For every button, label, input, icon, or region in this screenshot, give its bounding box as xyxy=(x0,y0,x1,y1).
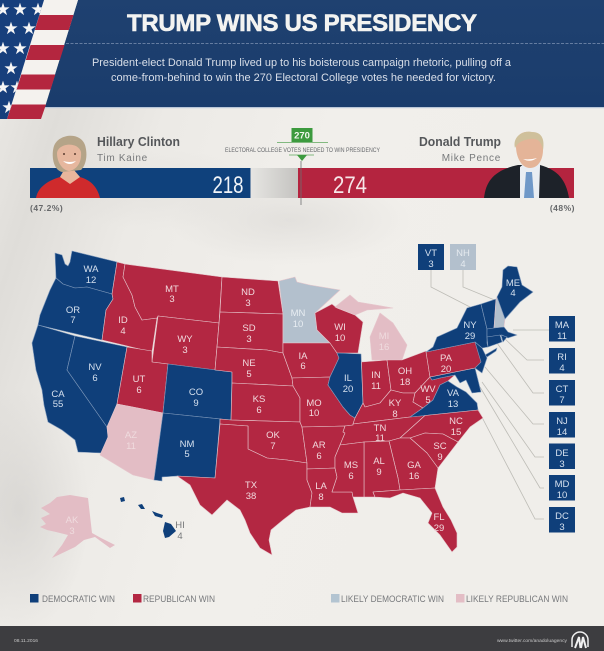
state: SC: 9 xyxy=(437,452,443,463)
state: ID: ID xyxy=(118,315,128,326)
icon: american flag: ★ xyxy=(12,0,28,19)
state: AZ xyxy=(100,404,163,480)
box: NJ: 14 xyxy=(557,427,567,438)
bar: Trump 274 xyxy=(298,168,574,198)
candidate: Donald Trump: Donald Trump xyxy=(419,135,501,149)
state: CO: 9 xyxy=(193,398,199,409)
box: MD: 10 xyxy=(557,490,567,501)
state: VA: VA xyxy=(447,388,460,399)
state: CA xyxy=(32,325,108,453)
state: WA xyxy=(55,251,117,294)
state: WV: 5 xyxy=(425,395,431,406)
badge: 270 xyxy=(292,128,312,142)
state: CT xyxy=(487,335,502,347)
state: AL: 9 xyxy=(376,467,382,478)
state: ND: ND xyxy=(241,287,255,298)
subtitle: come-from-behind to win the 270 Electoral College votes he needed for victory. xyxy=(111,72,496,84)
state: KY: 8 xyxy=(392,409,398,420)
state: TX: 38 xyxy=(246,491,256,502)
state: WV xyxy=(413,375,455,408)
box: DE: DE xyxy=(555,448,569,459)
state: OH xyxy=(387,351,430,393)
subtitle xyxy=(92,57,512,84)
state: VA: 13 xyxy=(448,399,458,410)
box: CT xyxy=(549,380,575,406)
state: KY xyxy=(353,390,423,424)
bar: remaining votes xyxy=(251,168,298,198)
state: NJ xyxy=(475,342,487,373)
state: VA xyxy=(410,381,478,417)
state: AR: AR xyxy=(312,440,326,451)
photo: Hillary Clinton xyxy=(36,136,100,198)
box: CT: 7 xyxy=(559,395,565,406)
state: IL xyxy=(328,353,363,418)
state: AZ: 11 xyxy=(126,441,136,452)
state: NH xyxy=(494,297,505,328)
state: SC xyxy=(410,433,458,468)
state: WI: WI xyxy=(334,322,346,333)
legend: republican win: REPUBLICAN WIN xyxy=(143,594,215,605)
state: WV: WV xyxy=(420,384,436,395)
box: VT xyxy=(418,244,444,270)
state: ME: 4 xyxy=(510,288,516,299)
state: MN: 10 xyxy=(293,319,303,330)
state: SC: SC xyxy=(433,441,447,452)
state: LA: 8 xyxy=(318,492,324,503)
box: DC xyxy=(549,507,575,533)
state: IN xyxy=(362,360,391,407)
state: WY: WY xyxy=(177,334,193,345)
state: NV: 6 xyxy=(92,373,98,384)
state: MN: MN xyxy=(291,308,306,319)
state: NV: NV xyxy=(88,362,102,373)
box: DE xyxy=(549,444,575,470)
US electoral map xyxy=(32,251,533,558)
box: NH xyxy=(450,244,476,270)
icon: american flag: ★ xyxy=(21,19,37,38)
state: NM: NM xyxy=(180,439,194,450)
candidate: Hillary Clinton: Hillary Clinton xyxy=(97,135,180,149)
box: RI: RI xyxy=(557,352,567,363)
header banner xyxy=(45,0,604,108)
state: WY: 3 xyxy=(182,345,188,356)
state: MO: MO xyxy=(306,398,322,409)
leader lines for small states xyxy=(431,270,549,519)
state: MD xyxy=(430,368,481,393)
state: ME xyxy=(497,266,533,319)
state: SD: 3 xyxy=(246,334,252,345)
state: AR xyxy=(302,426,345,469)
state: MI xyxy=(335,295,407,360)
box: DC: DC xyxy=(555,511,569,522)
state: ME: ME xyxy=(506,278,520,289)
state: WA: 12 xyxy=(86,275,96,286)
date: 08.11.2016 xyxy=(14,638,39,643)
state: LA: LA xyxy=(315,481,327,492)
state: NE: 5 xyxy=(246,369,252,380)
box: VT: VT xyxy=(425,248,437,259)
legend xyxy=(30,594,568,605)
state: MO: 10 xyxy=(309,408,319,419)
state: CA: 55 xyxy=(53,399,63,410)
legend: democratic win: DEMOCRATIC WIN xyxy=(42,594,115,605)
state: UT: UT xyxy=(133,374,146,385)
state: AK: 3 xyxy=(69,526,75,537)
state: NY xyxy=(426,304,497,357)
state: UT: 6 xyxy=(136,385,142,396)
box: CT: CT xyxy=(556,384,569,395)
state: CA: CA xyxy=(51,389,65,400)
title: TRUMP WINS US PRESIDENCY xyxy=(127,10,477,37)
footer xyxy=(0,626,604,651)
state: CO: CO xyxy=(189,387,203,398)
state: NY: 29 xyxy=(465,331,475,342)
box: NJ: NJ xyxy=(556,416,568,427)
state: FL xyxy=(373,488,457,552)
state: FL: 29 xyxy=(434,523,444,534)
state: ID: 4 xyxy=(120,326,126,337)
state: IA: 6 xyxy=(300,361,306,372)
state: KS xyxy=(231,383,300,422)
number: 274: 274 xyxy=(333,172,367,199)
subtitle: President-elect Donald Trump lived up to his boisterous campaign rhetoric, pulling off a xyxy=(92,57,512,69)
icon: american flag: ★ xyxy=(12,39,28,58)
state: AK xyxy=(40,495,115,558)
icon: american flag: ★ xyxy=(3,19,19,38)
state: OK: OK xyxy=(266,430,281,441)
state: IA xyxy=(283,343,339,378)
caption: electoral votes needed: ELECTORAL COLLEGE VOTES NEEDED TO WIN PRESIDENCY xyxy=(225,147,380,154)
icon: american flag: ★ xyxy=(1,98,17,117)
state: OH: 18 xyxy=(400,377,410,388)
state: NC xyxy=(400,410,483,442)
state: SD: SD xyxy=(242,323,256,334)
state: AR: 6 xyxy=(316,451,322,462)
icon: american flag: ★ xyxy=(30,0,46,19)
state: LA xyxy=(307,468,358,513)
state: IN: 11 xyxy=(371,381,381,392)
number: 218: 218 xyxy=(212,172,244,199)
state: GA: GA xyxy=(407,460,422,471)
state: MS: 6 xyxy=(348,471,354,482)
box: VT: 3 xyxy=(428,259,434,270)
box: MA: MA xyxy=(555,320,570,331)
box: RI xyxy=(549,348,575,374)
legend: likely republican win: LIKELY REPUBLICAN WIN xyxy=(466,594,568,605)
percentage: Clinton: (47.2%) xyxy=(30,203,63,213)
state: GA: 16 xyxy=(409,471,419,482)
state: GA xyxy=(389,438,438,490)
state: UT xyxy=(117,347,168,413)
state: TX: TX xyxy=(245,480,258,491)
state: HI: HI xyxy=(175,520,185,531)
box: MA: 11 xyxy=(557,331,567,342)
source url: www.twitter.com/anadoluagency xyxy=(497,638,568,643)
state: HI xyxy=(120,497,185,542)
icon: american flag: ★ xyxy=(9,78,25,97)
state: FL: FL xyxy=(433,512,445,523)
photo: Donald Trump xyxy=(484,132,569,198)
state: TN: TN xyxy=(374,423,386,434)
state: IN: IN xyxy=(371,370,381,381)
state: WI: 10 xyxy=(335,333,345,344)
state: ND: 3 xyxy=(245,298,251,309)
state: OK xyxy=(220,419,307,463)
270 threshold marker xyxy=(225,128,380,205)
score bar xyxy=(30,168,574,199)
state: ID xyxy=(102,262,157,352)
box: DE: 3 xyxy=(559,459,565,470)
state: NM: 5 xyxy=(184,449,190,460)
box: DC: 3 xyxy=(559,522,565,533)
state: PA xyxy=(426,342,482,377)
state: NY: NY xyxy=(463,320,477,331)
state: IL: 20 xyxy=(343,384,353,395)
state: MA xyxy=(487,327,517,338)
state: MN xyxy=(279,277,340,343)
box: NH: NH xyxy=(456,248,470,259)
box: NH: 4 xyxy=(460,259,466,270)
state: SD xyxy=(217,312,283,353)
running mate: Tim Kaine: Tim Kaine xyxy=(97,153,148,164)
state: MO xyxy=(292,377,355,427)
state: PA: PA xyxy=(440,353,453,364)
state: OH: OH xyxy=(398,366,412,377)
state: AZ: AZ xyxy=(125,430,137,441)
icon: american flag: ★ xyxy=(3,59,19,78)
box: MD: MD xyxy=(555,479,570,490)
state: RI xyxy=(501,335,507,342)
state: NE: NE xyxy=(242,358,256,369)
state: MS xyxy=(332,442,364,497)
state: MT xyxy=(123,264,222,323)
state: CO xyxy=(163,364,232,420)
state: TN xyxy=(340,416,425,445)
legend: likely democratic win: LIKELY DEMOCRATIC WIN xyxy=(341,594,444,605)
state: NM xyxy=(154,413,220,481)
state: IL: IL xyxy=(344,373,352,384)
box: RI: 4 xyxy=(559,363,565,374)
icon: american flag xyxy=(0,0,78,119)
state: MS: MS xyxy=(344,460,358,471)
state: OR xyxy=(38,278,113,340)
state: OK: 7 xyxy=(270,441,276,452)
state: MI: 16 xyxy=(379,342,389,353)
state: ND xyxy=(220,277,283,314)
state: KY: KY xyxy=(389,398,402,409)
state: KS: 6 xyxy=(256,405,262,416)
state: AL xyxy=(364,441,400,497)
state: MT: MT xyxy=(165,284,179,295)
state: MI: MI xyxy=(379,331,389,342)
state: OR: OR xyxy=(66,305,80,316)
state: WI xyxy=(315,304,363,353)
state: TN: 11 xyxy=(375,433,385,444)
state: NE xyxy=(215,347,293,386)
state: NC: NC xyxy=(449,416,463,427)
state: HI: 4 xyxy=(177,531,183,542)
state: IA: IA xyxy=(299,351,308,362)
state: TX xyxy=(177,424,312,555)
state: KS: KS xyxy=(253,394,265,405)
state: WY xyxy=(152,316,219,370)
state: NV xyxy=(67,336,127,427)
box: MA xyxy=(549,316,575,342)
box: NJ xyxy=(549,412,575,438)
bar: Clinton 218 xyxy=(30,168,250,198)
state: PA: 20 xyxy=(441,364,451,375)
state: MT: 3 xyxy=(169,294,175,305)
state: WA: WA xyxy=(84,264,99,275)
percentage: Trump: (48%) xyxy=(550,203,575,213)
state: VT xyxy=(481,299,496,329)
state: NC: 15 xyxy=(451,427,461,438)
state: AK: AK xyxy=(66,515,79,526)
state: OR: 7 xyxy=(70,315,76,326)
badge: 270: 270 xyxy=(294,130,310,142)
running mate: Mike Pence: Mike Pence xyxy=(442,153,501,164)
box: MD xyxy=(549,475,575,501)
icon: agency logo xyxy=(572,632,588,648)
state: AL: AL xyxy=(373,456,385,467)
